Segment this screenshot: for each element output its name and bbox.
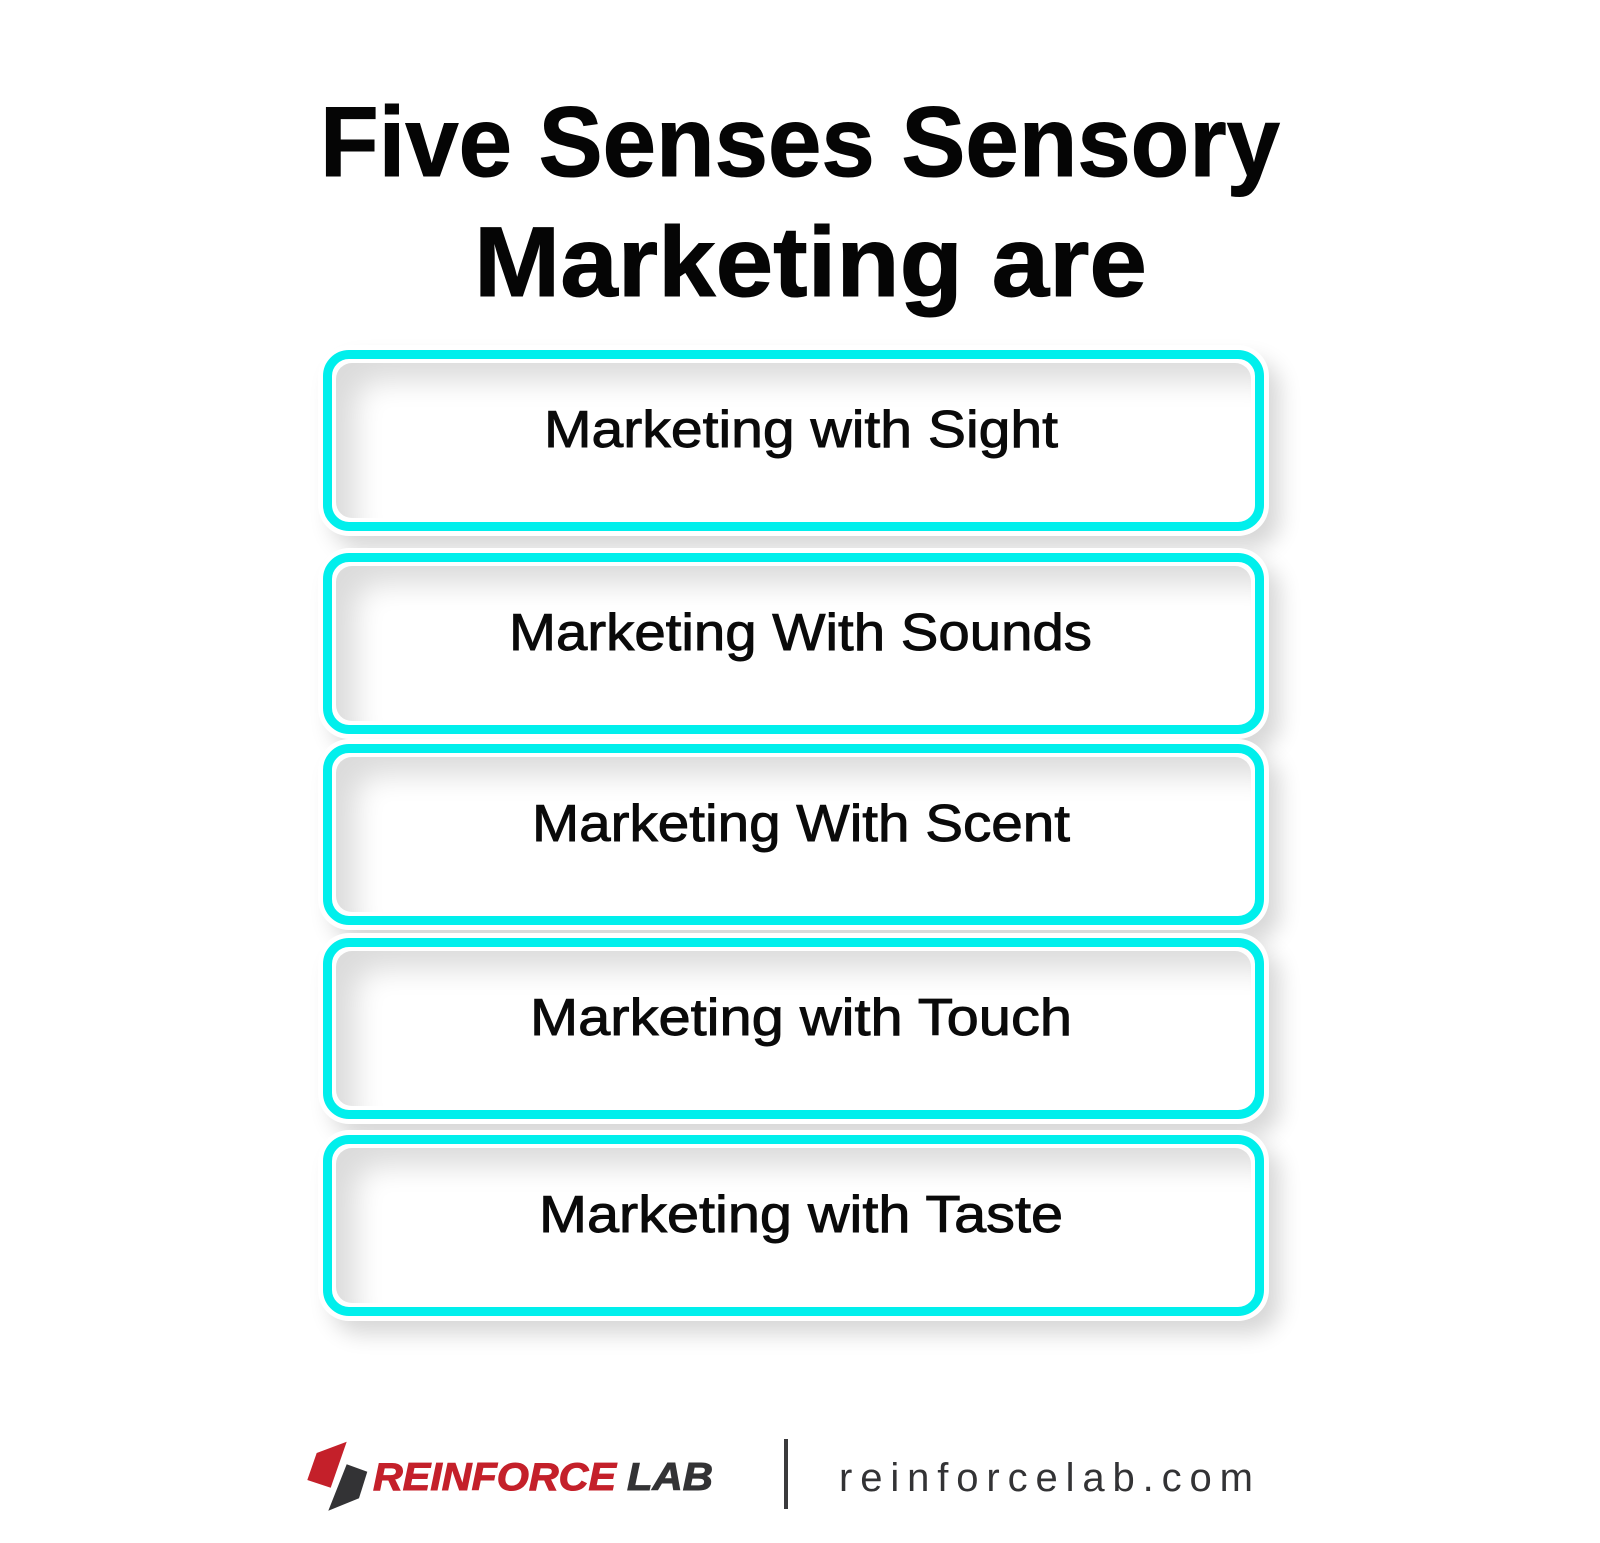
logo wordmark: LAB bbox=[627, 1456, 713, 1499]
panel: marketing with taste: Marketing with Taste bbox=[539, 1186, 1063, 1244]
panel: marketing with sight bbox=[323, 350, 1264, 531]
panel: marketing with touch: Marketing with Touch bbox=[530, 989, 1072, 1047]
footer divider bbox=[784, 1439, 788, 1509]
logo wordmark: REINFORCE bbox=[373, 1456, 617, 1499]
footer website url: reinforcelab.com bbox=[839, 1456, 1253, 1500]
panel: marketing with taste bbox=[323, 1135, 1264, 1316]
title bbox=[320, 86, 1280, 318]
panel: marketing with touch bbox=[323, 938, 1264, 1119]
title: Marketing are bbox=[474, 206, 1147, 317]
logo wordmark bbox=[373, 1456, 713, 1499]
panel: marketing with sight: Marketing with Sight bbox=[544, 401, 1059, 459]
panel: marketing with sounds bbox=[323, 553, 1264, 734]
title: Five Senses Sensory bbox=[320, 86, 1280, 197]
panel: marketing with scent: Marketing With Scent bbox=[532, 795, 1071, 853]
icon: logo mark bbox=[307, 1442, 367, 1511]
panel: marketing with sounds: Marketing With Sounds bbox=[509, 604, 1092, 662]
panel: marketing with scent bbox=[323, 744, 1264, 925]
